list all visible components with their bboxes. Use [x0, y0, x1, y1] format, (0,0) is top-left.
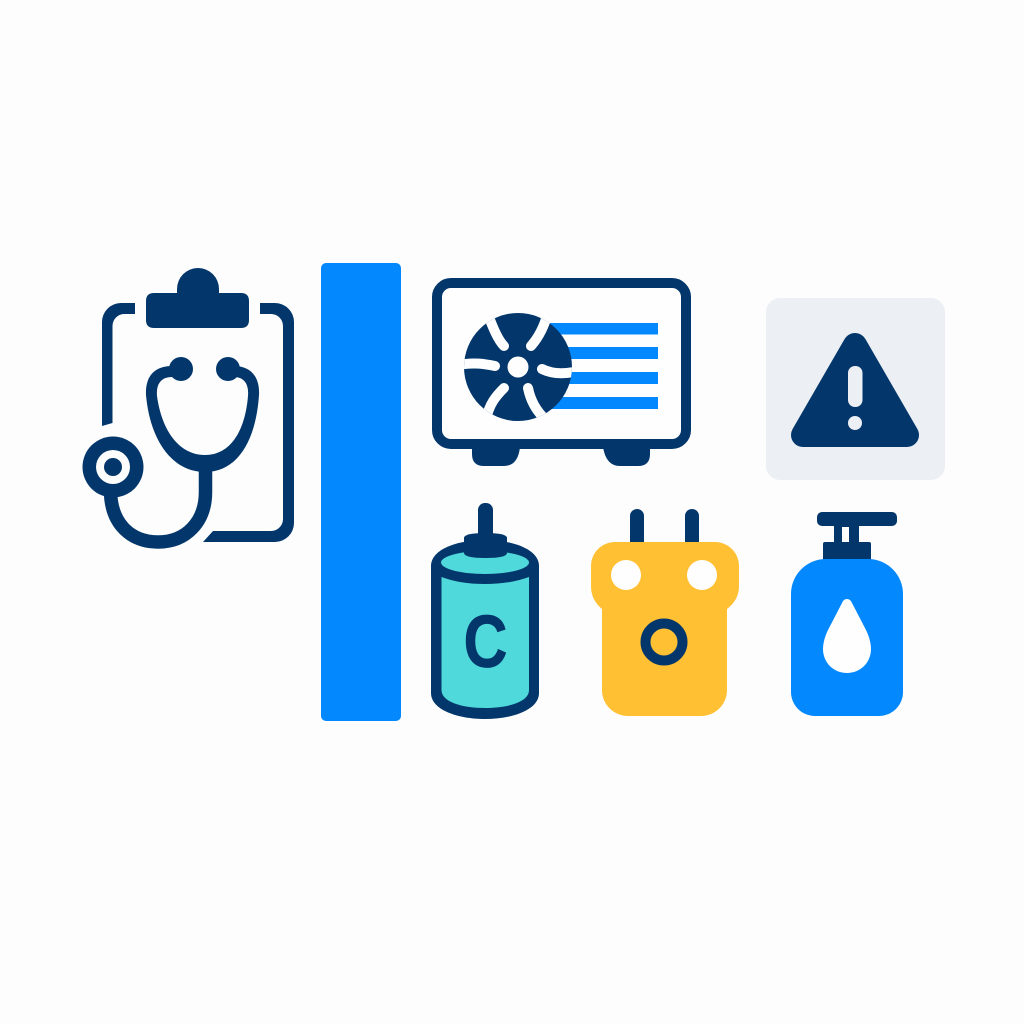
- plug prongs: [630, 509, 699, 544]
- unit feet: [472, 447, 650, 466]
- pump stem slit: [842, 527, 849, 542]
- warning panel background: [766, 298, 945, 480]
- capacitor top face: [441, 551, 529, 574]
- plug holes: [611, 560, 717, 590]
- bottle body: [791, 559, 903, 716]
- water drop: [823, 599, 871, 673]
- blue vertical bar: [321, 263, 401, 721]
- pump head: [817, 512, 897, 562]
- icon: clipboard with stethoscope: [82, 268, 294, 542]
- plug ring: [646, 624, 682, 660]
- stethoscope ear tips: [169, 357, 240, 381]
- clipboard clip: [146, 268, 249, 328]
- icon: air conditioner outdoor unit: [437, 283, 686, 466]
- icon: warning panel: [766, 298, 945, 480]
- plug body: [591, 542, 739, 716]
- stethoscope lower tube: [110, 464, 206, 542]
- capacitor letter C: C: [464, 601, 507, 683]
- vent stripes: [550, 323, 658, 409]
- stethoscope tubing: [146, 366, 259, 472]
- icon: lubricant pump bottle: [791, 512, 903, 716]
- capacitor terminal: [464, 503, 507, 558]
- clipboard outline: [102, 303, 294, 542]
- capacitor shell: [431, 540, 539, 719]
- stethoscope chest piece: [82, 436, 144, 498]
- warning triangle: [803, 345, 907, 435]
- capacitor front face: [442, 577, 529, 708]
- icon: plug: [591, 509, 739, 716]
- fan blades: [464, 313, 572, 421]
- exclamation mark: [848, 366, 862, 430]
- icon: capacitor: [431, 503, 539, 719]
- unit casing: [437, 283, 686, 444]
- infographic canvas: [82, 263, 945, 721]
